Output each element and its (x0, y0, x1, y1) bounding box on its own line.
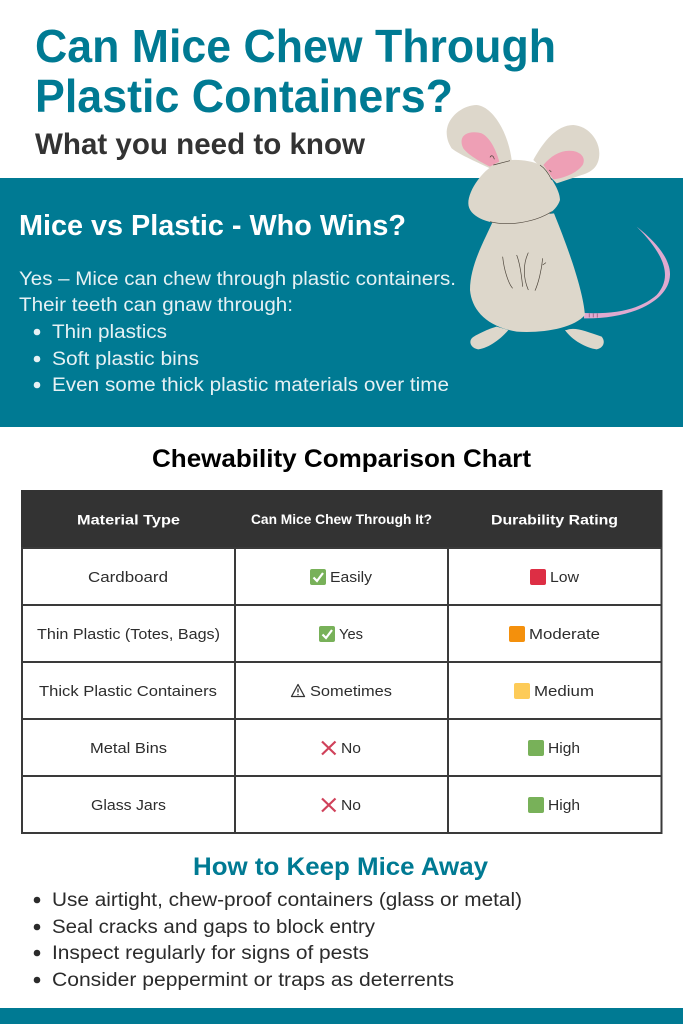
row: thick plastic: Sometimes (310, 683, 392, 700)
row: thin plastic: Moderate (529, 626, 600, 643)
prevention heading: How to Keep Mice Away (193, 853, 488, 881)
row: cardboard: Easily (330, 569, 373, 586)
panel heading: Mice vs Plastic - Who Wins? (19, 210, 406, 242)
row: cardboard: Low (550, 569, 579, 586)
row: thick plastic: Medium (534, 683, 594, 700)
plastics list: Even some thick plastic materials over time (52, 375, 449, 396)
subtitle: What you need to know (35, 128, 366, 161)
answer text: Their teeth can gnaw through: (19, 295, 293, 316)
table header: Durability Rating (491, 512, 618, 528)
row: metal bins: Metal Bins (90, 740, 167, 757)
row: cardboard (88, 569, 579, 586)
prevention tips list (34, 890, 522, 991)
answer text (19, 269, 456, 316)
table header: Material Type (77, 512, 180, 528)
row: metal bins: High (548, 740, 580, 757)
row: glass jars: High (548, 797, 580, 814)
row: glass jars: Glass Jars (91, 797, 166, 814)
prevention tips list: Inspect regularly for signs of pests (52, 943, 369, 964)
plastics list: Thin plastics (52, 322, 167, 343)
row: thick plastic (39, 683, 594, 700)
title: Plastic Containers? (35, 70, 453, 122)
title: Can Mice Chew Through (35, 20, 556, 72)
panel: mice vs plastic (0, 178, 683, 427)
icon: mouse illustration (447, 105, 670, 349)
answer text: Yes – Mice can chew through plastic containers. (19, 269, 456, 290)
comparison table (21, 490, 662, 833)
row: glass jars (91, 797, 580, 814)
row: glass jars: No (341, 797, 361, 814)
row: metal bins (90, 740, 580, 757)
prevention tips list: Use airtight, chew-proof containers (glass or metal) (52, 890, 522, 911)
row: thick plastic: Thick Plastic Containers (39, 683, 217, 700)
prevention tips list: Consider peppermint or traps as deterrents (52, 970, 454, 991)
prevention tips list: Seal cracks and gaps to block entry (52, 917, 376, 938)
plastics list (34, 322, 449, 396)
row: thin plastic: Yes (339, 626, 363, 643)
chart title: Chewability Comparison Chart (152, 445, 532, 473)
table header (21, 490, 662, 548)
table header: Can Mice Chew Through It? (251, 511, 432, 527)
row: thin plastic (37, 626, 600, 643)
footer band (0, 1008, 683, 1024)
row: thin plastic: Thin Plastic (Totes, Bags) (37, 626, 220, 643)
row: metal bins: No (341, 740, 361, 757)
plastics list: Soft plastic bins (52, 349, 199, 370)
title (35, 20, 556, 122)
row: cardboard: Cardboard (88, 569, 168, 586)
